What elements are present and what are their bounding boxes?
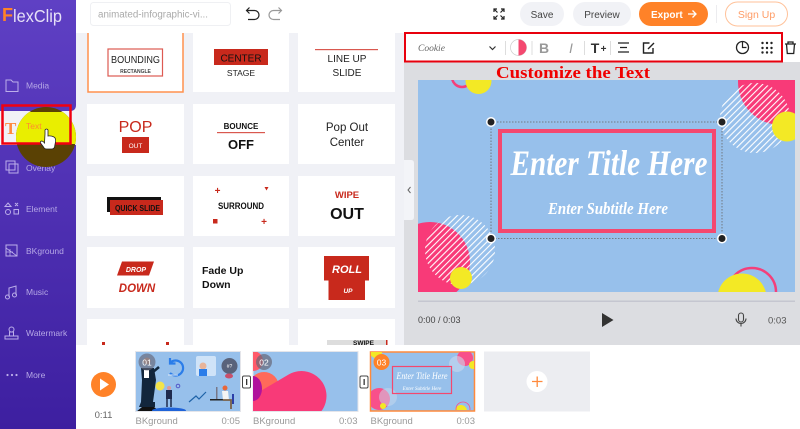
template card: bounding rectangle: RECTANGLE (120, 69, 152, 75)
badge 01: 01 (142, 358, 152, 368)
icon: italic: I (569, 40, 573, 56)
template card: drop down: DROP (126, 267, 146, 274)
nav: bkground (6, 245, 64, 256)
template card: partial row: SWIPE (353, 340, 375, 347)
font selector: Cookie (418, 44, 445, 54)
logo: F (2, 5, 13, 25)
icon: align (618, 43, 629, 52)
clip 03 selected: Enter Title Here (396, 372, 448, 382)
panel: template list (76, 20, 404, 359)
illustration: chat badge: #? (227, 364, 232, 370)
clip 01 (136, 352, 240, 427)
title frame (500, 131, 714, 231)
file name field: animated-infographic-vi... (98, 10, 208, 20)
template card: bounding rectangle (87, 33, 184, 93)
template card: fade up down: Fade Up (202, 265, 243, 277)
button: export: Export (651, 10, 683, 21)
template card: surround: SURROUND (218, 201, 264, 211)
button: play all (91, 372, 116, 421)
clip 02: 0:03 (339, 416, 358, 427)
icon: size plus: + (601, 44, 607, 55)
nav: watermark: Watermark (26, 328, 68, 338)
icon: edit (644, 43, 654, 53)
transition 2 (360, 376, 368, 388)
file name field (90, 2, 230, 26)
template card: partial row (87, 319, 395, 345)
icon: trend line (189, 392, 206, 402)
clip 03 selected: Enter Subtitle Here (402, 387, 442, 392)
icon: location pin (176, 384, 180, 388)
clip 02: BKground (253, 416, 295, 427)
nav: overlay: Overlay (26, 163, 56, 173)
nav: text: T (5, 119, 17, 138)
header bar (76, 0, 800, 33)
clip 03 selected (368, 346, 477, 427)
template card: surround (193, 176, 289, 236)
nav: more (6, 370, 46, 380)
clip 03 selected: BKground (370, 416, 413, 427)
button: sign up (726, 2, 788, 26)
icon: fullscreen (494, 9, 504, 19)
template card: roll up (298, 247, 395, 308)
template card: drop down (87, 247, 184, 308)
panel: editor background (404, 62, 800, 345)
cursor highlight circle (16, 106, 76, 168)
template card: pop out center (298, 104, 395, 164)
slide subtitle: Enter Subtitle Here (547, 199, 668, 218)
icon: grid dots (761, 42, 773, 54)
clip 02 (252, 351, 358, 426)
template card: drop down: DOWN (119, 283, 156, 295)
nav: media (6, 80, 49, 92)
badge 03: 03 (377, 358, 386, 368)
logo: lexClip (13, 6, 62, 26)
nav: text: Text (26, 121, 42, 131)
illustration: desk worker (210, 386, 234, 409)
add clip button (484, 352, 590, 412)
transition 1 (242, 376, 250, 388)
template card: fade up down: Down (202, 279, 231, 291)
nav: music (6, 286, 49, 299)
nav: music: Music (26, 287, 49, 297)
template card: bounce off: BOUNCE (224, 122, 259, 131)
nav: watermark (5, 327, 68, 339)
template card: pop out: OUT (129, 143, 142, 150)
clip 03 selected: 0:03 (456, 416, 475, 427)
nav: overlay (6, 161, 56, 173)
template card: pop out (87, 104, 184, 164)
template card: surround: + (261, 217, 267, 228)
nav: text (5, 119, 42, 138)
illustration: backpacker (166, 386, 172, 407)
nav: bkground: BKground (26, 246, 64, 256)
nav: element: Element (26, 204, 58, 214)
template card: wipe out: WIPE (335, 190, 359, 201)
icon: clock (742, 42, 746, 48)
button: preview (573, 2, 631, 26)
nav: media: Media (26, 80, 49, 90)
illustration: phone person (196, 356, 216, 376)
template card: bounding rectangle: BOUNDING (111, 54, 160, 66)
template card: bounce off (193, 104, 289, 164)
panel: slide canvas (418, 80, 795, 292)
icon: undo (246, 8, 259, 20)
callout: text tab highlight (2, 106, 70, 144)
text tab (0, 105, 76, 145)
font selector (418, 44, 496, 54)
icon: refresh arrow (170, 358, 183, 376)
template card: pop out center: Pop Out (326, 122, 369, 134)
template card: fade up down (193, 247, 289, 308)
playback controls (418, 300, 795, 327)
badge 02: 02 (259, 358, 269, 368)
template card: wipe out: OUT (330, 206, 364, 223)
illustration: yellow dot (156, 382, 164, 390)
template card: center stage: CENTER (220, 54, 262, 64)
playback controls: 0:00 / 0:03 (418, 315, 461, 325)
clip 01: 0:05 (222, 416, 240, 427)
button: save: Save (531, 10, 554, 21)
template card: quick slide: QUICK SLIDE (115, 204, 161, 213)
template card: quick slide (87, 176, 184, 236)
icon: redo (269, 8, 282, 20)
icon: hand cursor (40, 129, 56, 149)
button: save (520, 2, 564, 26)
figure: businessman (136, 358, 159, 412)
callout: customize the text: Customize the Text (496, 63, 650, 82)
icon: text size: T (591, 40, 600, 56)
text toolbar (404, 33, 800, 62)
template card: pop out center: Center (330, 137, 364, 149)
shapes: bottom right (718, 266, 778, 292)
template card: center stage (193, 33, 289, 92)
template card: wipe out (298, 176, 395, 236)
icon: colour picker (510, 40, 526, 56)
nav: element (5, 203, 58, 214)
button: sign up: Sign Up (738, 9, 775, 21)
slide title: Enter Title Here (510, 143, 708, 183)
playback controls: 0:03 (768, 316, 786, 326)
icon: trash (785, 42, 796, 54)
selection box (486, 117, 727, 244)
callout: toolbar highlight (405, 33, 782, 62)
icon: clock ring (736, 42, 748, 54)
template card: line up slide (298, 33, 395, 92)
shapes: top left (451, 80, 492, 94)
button: export (639, 2, 708, 26)
shapes: top right (720, 80, 795, 153)
nav: more: More (26, 370, 46, 380)
illustration: ground (152, 408, 186, 411)
template card: roll up: ROLL (332, 264, 362, 276)
template card: line up slide: SLIDE (333, 68, 362, 79)
template card: roll up: UP (343, 288, 353, 295)
shapes: bottom left (418, 215, 495, 292)
button: play all: 0:11 (95, 410, 112, 421)
clip 01: BKground (136, 416, 178, 427)
template card: pop out: POP (119, 119, 152, 136)
panel: sidebar (0, 0, 76, 429)
panel: timeline (91, 351, 590, 426)
template card: bounce off: OFF (228, 137, 254, 152)
icon: bold: B (539, 40, 549, 56)
template card: surround: + (215, 186, 221, 197)
button: preview: Preview (584, 10, 621, 21)
template card: line up slide: LINE UP (328, 54, 367, 65)
template card: center stage: STAGE (227, 68, 255, 78)
